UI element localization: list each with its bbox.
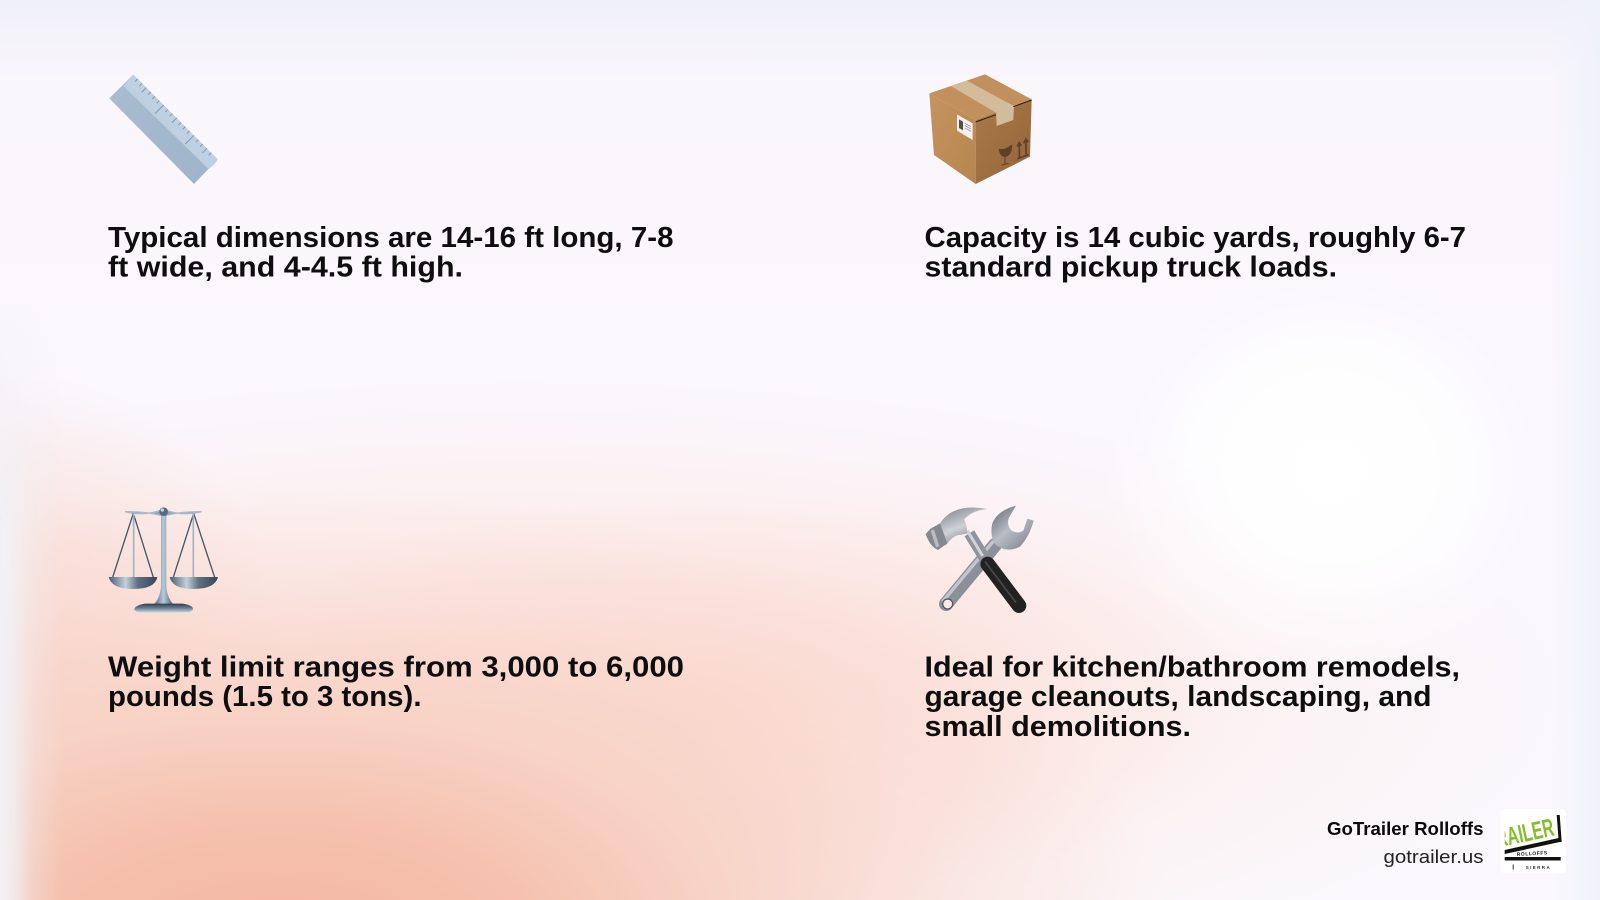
- text: uses: small demolitions.: [924, 711, 1191, 743]
- brand name: GoTrailer Rolloffs: [1327, 818, 1484, 839]
- logo: ROLLOFFS: [1517, 850, 1548, 858]
- text: dimensions: ft wide, and 4-4.5 ft high.: [108, 252, 463, 284]
- panel: uses: [924, 506, 1460, 743]
- panel: capacity: [924, 74, 1466, 283]
- icon: ruler: [109, 75, 218, 184]
- logo: RAILER: [1493, 814, 1557, 853]
- text: weight: Weight limit ranges from 3,000 to 6,000: [108, 652, 684, 684]
- panel: dimensions: [108, 75, 673, 284]
- logo: SIERRA: [1526, 865, 1551, 870]
- text: uses: garage cleanouts, landscaping, and: [924, 681, 1432, 713]
- text: uses: Ideal for kitchen/bathroom remodels,: [924, 652, 1460, 684]
- brand url: gotrailer.us: [1384, 846, 1484, 867]
- text: weight: pounds (1.5 to 3 tons).: [108, 681, 422, 713]
- text: capacity: Capacity is 14 cubic yards, roughly 6-7: [924, 222, 1466, 254]
- panel: weight: [108, 507, 684, 713]
- icon: balance scale: [109, 507, 218, 612]
- text: capacity: standard pickup truck loads.: [924, 252, 1337, 284]
- icon: hammer and wrench: [926, 506, 1034, 609]
- logo: [1504, 809, 1566, 873]
- footer: brand: [1327, 809, 1566, 873]
- icon: cardboard box: [929, 74, 1032, 184]
- text: dimensions: Typical dimensions are 14-16 ft long, 7-8: [108, 222, 673, 254]
